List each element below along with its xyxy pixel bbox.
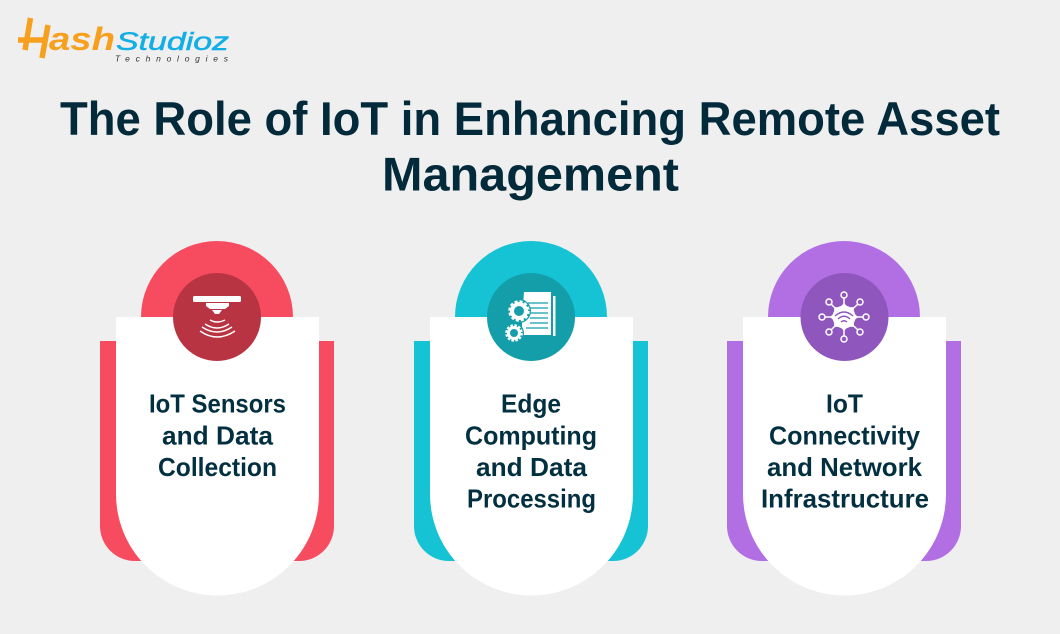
teal backing shape	[414, 341, 648, 561]
panel: IoT sensors and data collection	[100, 241, 334, 596]
logo: HashStudioz Technologies: ash	[49, 21, 115, 57]
label: Infrastructure	[761, 484, 929, 514]
logo: HashStudioz Technologies	[18, 18, 230, 64]
purple dome	[768, 241, 920, 317]
label: Computing	[465, 420, 597, 450]
icon: document with gears	[487, 273, 575, 361]
label: Edge	[501, 388, 561, 418]
label: and Data	[162, 420, 274, 450]
title: Management	[382, 148, 679, 202]
label: and Data	[476, 452, 588, 482]
title	[60, 93, 1000, 202]
label: and Network	[767, 452, 923, 482]
white card	[430, 317, 633, 596]
white card	[116, 317, 319, 596]
icon: network hub with wifi	[800, 273, 888, 361]
title: The Role of IoT in Enhancing Remote Asset	[60, 93, 1000, 146]
label: IoT Sensors	[149, 388, 286, 418]
label: Connectivity	[769, 420, 921, 450]
logo: HashStudioz Technologies: Studioz	[116, 28, 230, 56]
label	[465, 388, 597, 514]
label	[761, 388, 929, 514]
icon: ceiling sensor	[173, 273, 261, 361]
label: IoT	[826, 388, 863, 418]
red backing shape	[100, 341, 334, 561]
label	[149, 388, 286, 482]
logo: HashStudioz Technologies: Technologies	[115, 54, 229, 64]
label: Processing	[467, 484, 596, 514]
red dome	[141, 241, 293, 317]
panel: edge computing and data processing	[414, 241, 648, 596]
teal dome	[455, 241, 607, 317]
purple backing shape	[727, 341, 961, 561]
label: Collection	[158, 452, 277, 482]
panel: IoT connectivity and network infrastructure	[727, 241, 961, 596]
white card	[743, 317, 946, 596]
